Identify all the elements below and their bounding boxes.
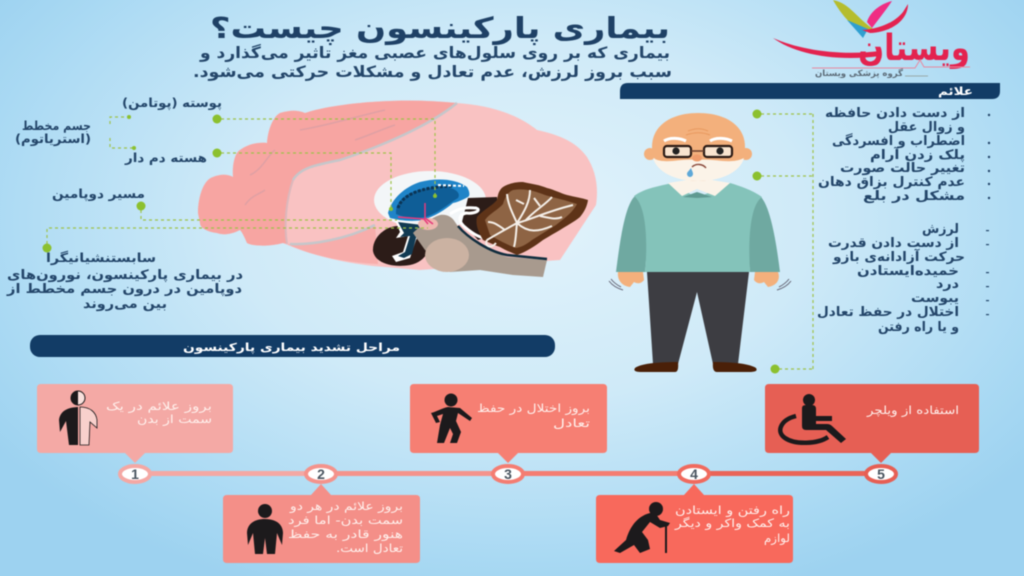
heading bar: symptoms bbox=[620, 83, 1000, 99]
man: hands bbox=[618, 272, 644, 287]
substantia nigra note: در بیماری پارکینسون، نورون‌های bbox=[7, 268, 243, 283]
man: shoes bbox=[634, 362, 678, 372]
stage card 5: استفاده از ویلچر bbox=[866, 403, 959, 418]
logo bbox=[773, 0, 970, 79]
heading bar: stages bbox=[30, 335, 555, 357]
symptom list: non-motor: پلک زدن آرام bbox=[870, 146, 965, 163]
step 5 marker bbox=[866, 466, 896, 482]
symptom list: non-motor: از دست دادن حافظه bbox=[825, 106, 965, 121]
brain: dark mass bbox=[373, 226, 430, 266]
substantia nigra note bbox=[6, 268, 243, 312]
step 4 marker bbox=[679, 466, 709, 482]
man: eyebrows bbox=[664, 138, 732, 141]
man: beard bbox=[653, 158, 744, 181]
intro text: بیماری که بر روی سلول‌های عصبی مغز تاثیر می‌گذارد و bbox=[199, 43, 670, 62]
symptom list: non-motor: عدم کنترل بزاق دهان bbox=[818, 175, 965, 190]
stage card 4: لوازم bbox=[764, 531, 790, 546]
brain: white halo bbox=[374, 171, 486, 229]
symptom list: non-motor: مشکل در بلع bbox=[863, 189, 965, 204]
man: tremor marks bbox=[609, 279, 791, 290]
icon: person with cane bbox=[614, 502, 670, 553]
step 3 marker bbox=[493, 466, 523, 482]
brain: cerebellum bbox=[476, 182, 588, 255]
timeline bbox=[120, 466, 896, 482]
stage card 3: بروز اختلال در حفظ bbox=[477, 401, 590, 416]
stage card 3: تعادل bbox=[553, 416, 590, 430]
man: drool drop bbox=[687, 168, 693, 177]
man: ears and head bbox=[644, 148, 656, 160]
brain labels: هسته دم دار bbox=[124, 150, 207, 166]
brain callout leader lines bbox=[42, 114, 437, 252]
symptom list: non-motor: تغییر حالت صورت bbox=[840, 161, 965, 176]
step 4 marker: 4 bbox=[690, 466, 698, 482]
icon: half-affected person bbox=[59, 391, 97, 445]
symptom list: motor: لرزش bbox=[922, 222, 959, 237]
brain: brainstem bbox=[413, 215, 547, 277]
logo: گروه پزشکی ویستان bbox=[815, 68, 903, 79]
symptom list: motor: از دست دادن قدرت bbox=[828, 236, 959, 251]
stage card 2: سمت بدن- اما فرد bbox=[288, 513, 403, 528]
symptom list: motor: اختلال در حفظ تعادل bbox=[817, 305, 959, 320]
man: nose and mouth bbox=[692, 154, 702, 162]
stage card 1: بروز علائم در یک bbox=[106, 399, 212, 414]
brain: sulci bbox=[293, 103, 457, 180]
title: بیماری پارکینسون چیست؟ bbox=[210, 11, 670, 46]
intro text bbox=[193, 43, 672, 81]
symptom list: motor: درد bbox=[936, 277, 959, 292]
logo: ویستان bbox=[858, 28, 970, 69]
symptom list: non-motor: و زوال عقل bbox=[888, 120, 965, 135]
brain labels: پوسته (پوتامن) bbox=[122, 95, 222, 110]
substantia nigra note: دوپامین در درون جسم مخطط از bbox=[6, 282, 242, 297]
brain: cerebrum bbox=[198, 101, 597, 270]
brain: pons bbox=[425, 238, 469, 272]
stage card 4: به کمک واکر و دیگر bbox=[674, 516, 790, 531]
symptom list: motor: خمیده‌ایستادن bbox=[857, 264, 959, 279]
step 2 marker bbox=[306, 466, 336, 482]
icon: wheelchair bbox=[780, 394, 846, 443]
step 5 marker: 5 bbox=[877, 466, 885, 482]
symptom leader lines bbox=[752, 110, 813, 374]
brain: pathway pink bbox=[398, 203, 433, 224]
man: pants bbox=[647, 272, 749, 364]
man: collar bbox=[668, 178, 730, 196]
stage card 2: تعادل است. bbox=[336, 541, 403, 555]
stage card 5 bbox=[765, 384, 979, 463]
stage card 1: سمت از بدن bbox=[137, 412, 212, 427]
step 3 marker: 3 bbox=[504, 466, 512, 482]
brain labels bbox=[15, 95, 222, 265]
step 1 marker bbox=[120, 466, 150, 482]
brain illustration bbox=[198, 101, 597, 277]
brain labels: سابستنشیانیگرا bbox=[46, 250, 156, 265]
symptom list: motor bbox=[817, 222, 989, 335]
illustration: elderly man bbox=[609, 113, 791, 372]
icon: standing person bbox=[247, 504, 283, 554]
stage card 2: هنور قادر به حفظ bbox=[288, 527, 403, 542]
brain labels: جسم مخطط bbox=[22, 118, 91, 133]
symptom list: motor: و یا راه رفتن bbox=[878, 320, 959, 335]
brain labels: مسیر دوپامین bbox=[52, 186, 145, 201]
heading bar: symptoms: علائم bbox=[938, 85, 973, 98]
brain labels: (استریاتوم) bbox=[15, 131, 91, 147]
brain: frontal lobe bbox=[198, 101, 457, 246]
symptom list: motor: حرکت آزادانه‌ی بازو bbox=[832, 248, 965, 265]
brain: stem-cerebellum gap bbox=[462, 197, 500, 240]
substantia nigra note: بین می‌روند bbox=[83, 297, 167, 312]
stage card 1 bbox=[37, 384, 233, 463]
stage card 4: راه رفتن و ایستادن bbox=[675, 503, 790, 518]
brain: basal ganglia blue bbox=[388, 179, 469, 221]
man: sweater bbox=[634, 183, 762, 272]
icon: walking person with imbalance bbox=[431, 394, 472, 443]
intro text: سبب بروز لرزش، عدم تعادل و مشکلات حرکتی می‌شود. bbox=[193, 63, 672, 81]
symptom list: motor: یبوست bbox=[911, 291, 959, 306]
heading bar: stages: مراحل تشدید بیماری پارکینسون bbox=[183, 341, 400, 354]
stage card 4 bbox=[596, 484, 793, 563]
symptom list: non-motor: اضطراب و افسردگی bbox=[832, 133, 965, 149]
step 2 marker: 2 bbox=[317, 466, 325, 482]
man: glasses bbox=[664, 146, 691, 157]
man: sleeves bbox=[616, 196, 650, 272]
stage card 2 bbox=[223, 484, 420, 563]
brain: cerebellum branches bbox=[486, 190, 573, 247]
step 1 marker: 1 bbox=[131, 466, 139, 482]
stage card 2: بروز علائم در هر دو bbox=[289, 499, 403, 514]
stage card 3 bbox=[410, 384, 607, 463]
symptom list: non-motor bbox=[818, 106, 990, 204]
